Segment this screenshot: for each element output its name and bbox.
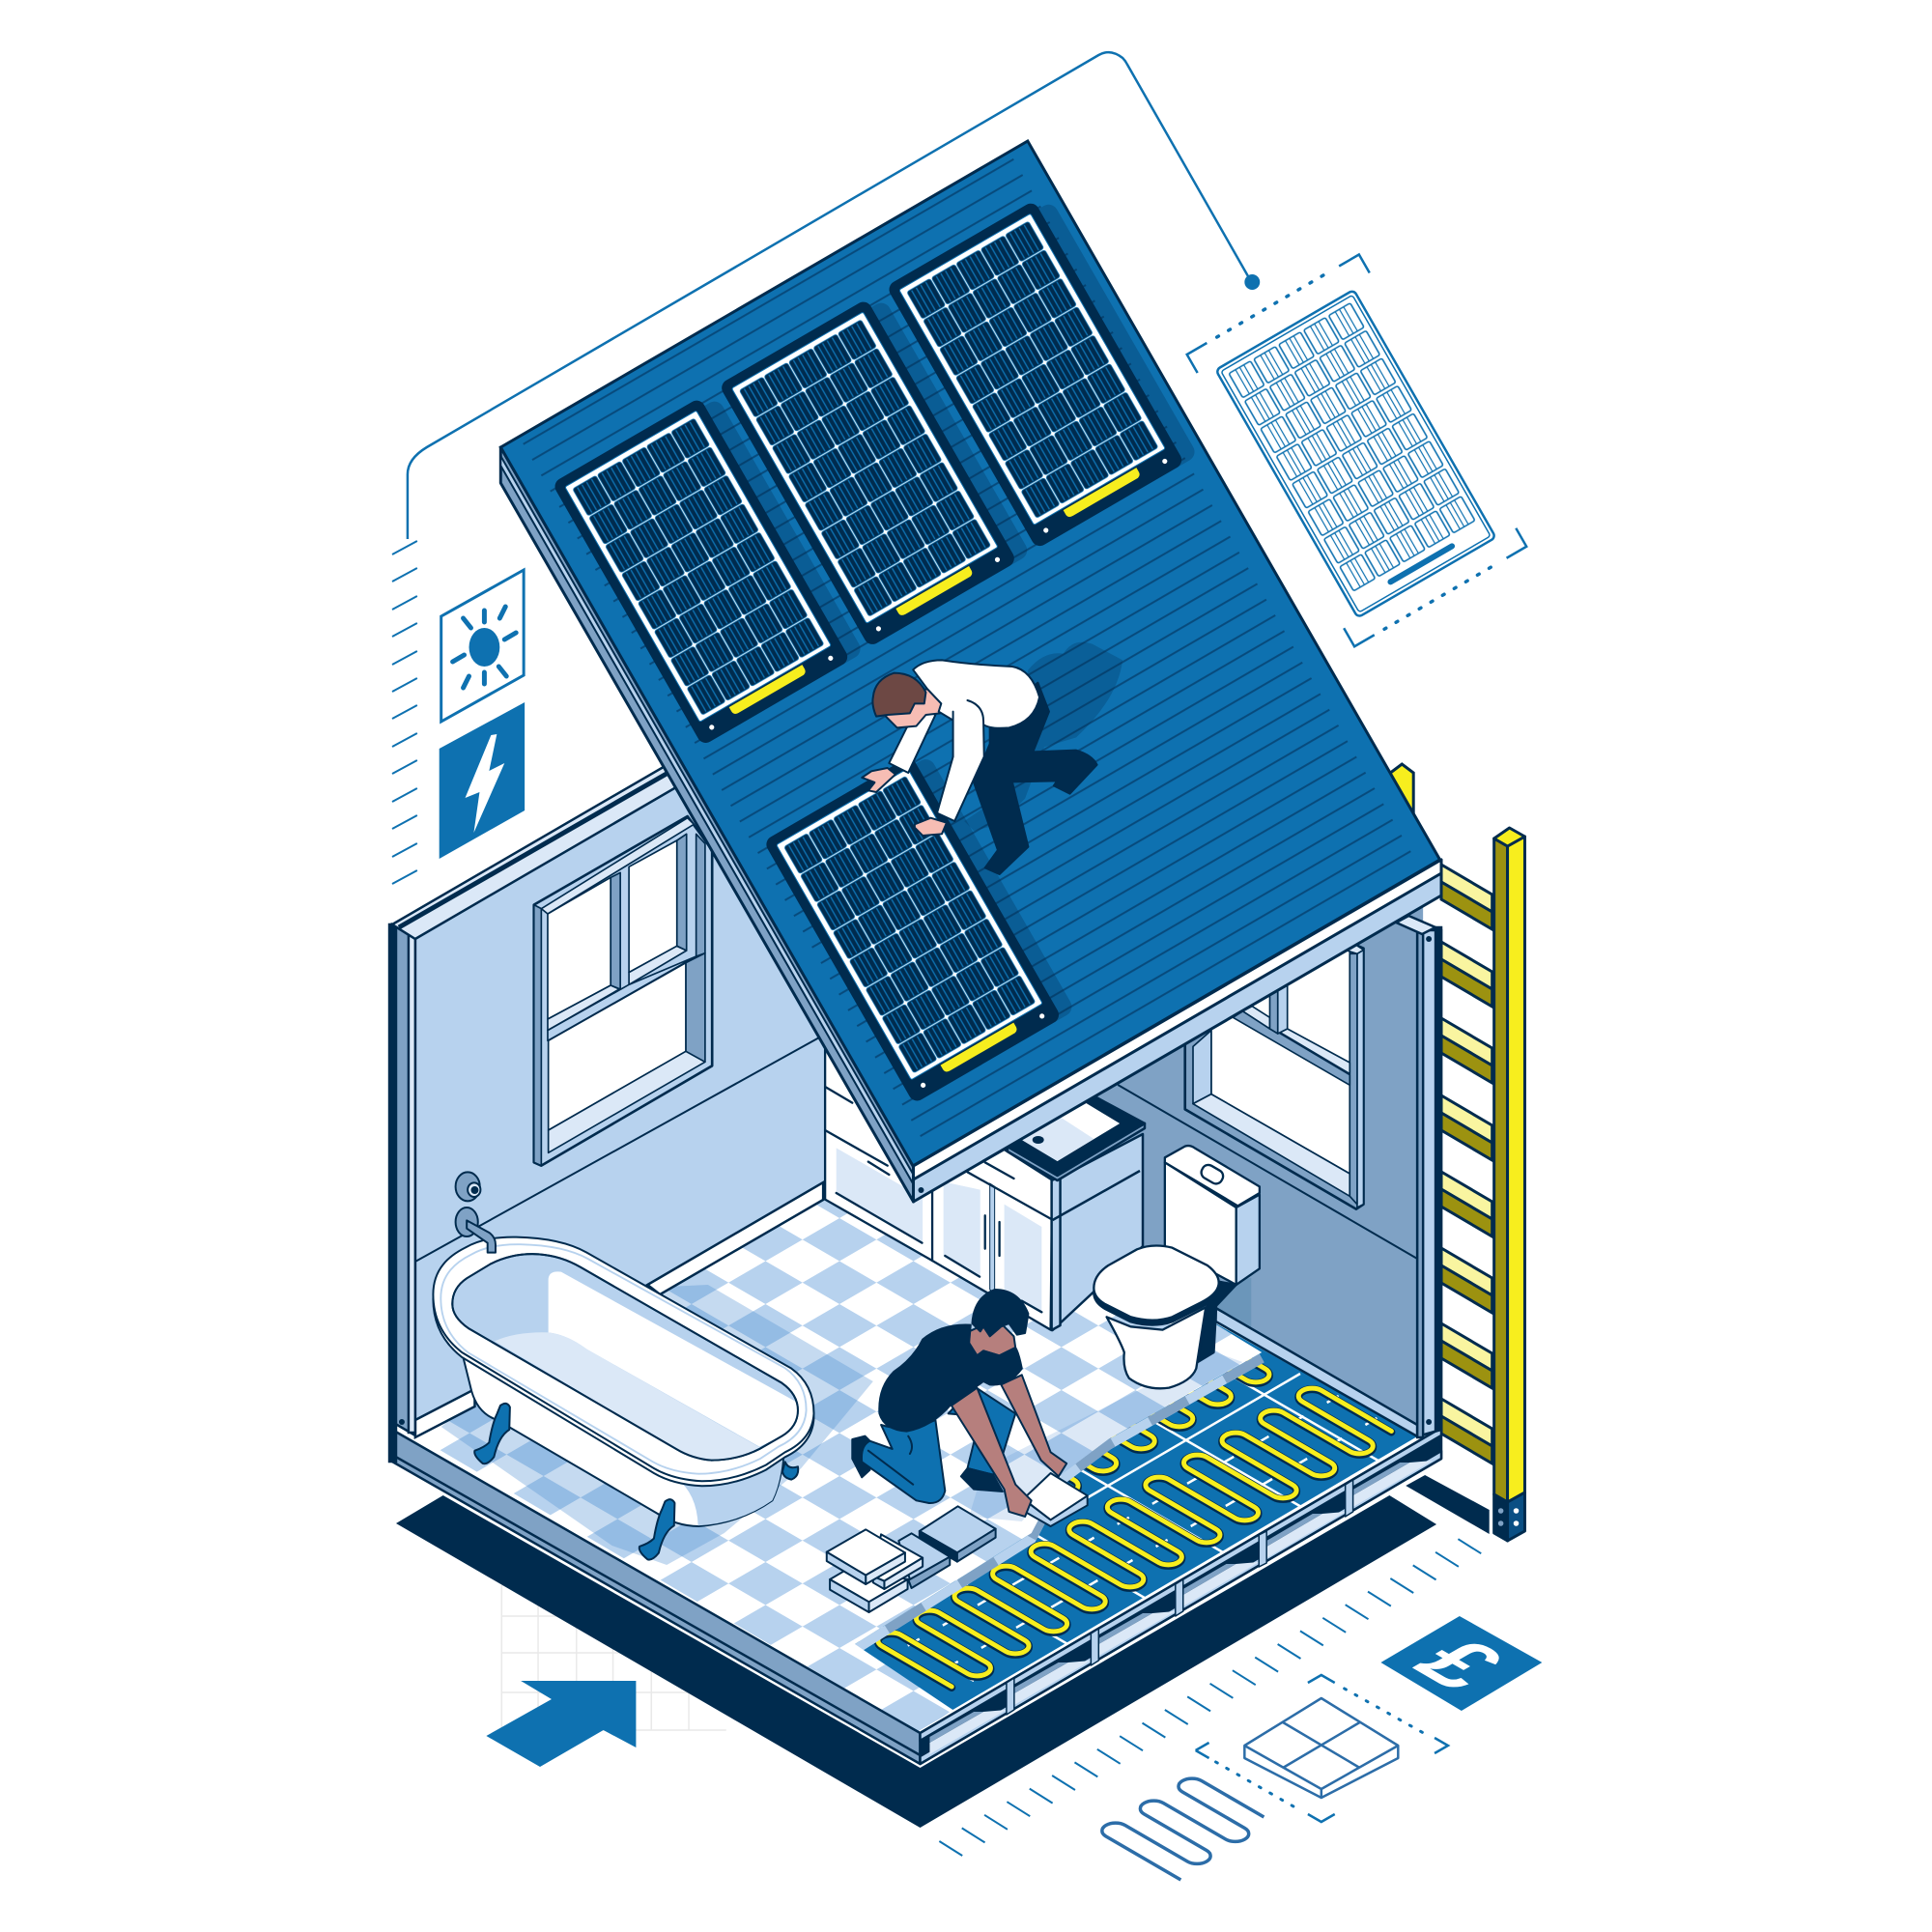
callout connector line bbox=[408, 52, 1250, 539]
tile shadow under bath bbox=[441, 1285, 873, 1565]
panel: floor bbox=[415, 1144, 1417, 1733]
sink bbox=[1022, 1103, 1120, 1161]
slim white tile bbox=[873, 1534, 923, 1589]
checker tiles bbox=[415, 1144, 1262, 1733]
window: right wall bbox=[1185, 945, 1364, 1209]
near arm bbox=[952, 1388, 1032, 1517]
frame: left post bbox=[389, 765, 681, 1462]
person: solar installer bbox=[862, 642, 1122, 874]
bracket: solar panel outline bbox=[1187, 255, 1526, 646]
heating cable rows bbox=[768, 1324, 1399, 1691]
roof bbox=[500, 141, 1441, 1202]
panel: right wall bbox=[920, 580, 1423, 1439]
solar panel 3 bbox=[886, 192, 1198, 549]
roof left side edge bbox=[500, 447, 914, 1202]
held tile bbox=[1023, 1473, 1088, 1526]
door divider bbox=[990, 1183, 995, 1293]
heating cable: lower row bbox=[871, 1385, 1399, 1691]
arrow bbox=[486, 1681, 636, 1767]
right hand bbox=[915, 818, 947, 836]
door lines bbox=[945, 1162, 1051, 1312]
roof surface bbox=[500, 141, 1440, 1166]
trousers bbox=[974, 683, 1097, 874]
icon: heating coil outline bbox=[1096, 1776, 1276, 1880]
neck and face bbox=[969, 1325, 1015, 1355]
basin floor bbox=[495, 1332, 759, 1461]
cabinets bbox=[825, 1050, 1145, 1330]
left wall top beam bbox=[392, 765, 681, 939]
door underline bbox=[837, 1193, 922, 1243]
vanity door left bbox=[944, 1181, 980, 1277]
dado line bbox=[415, 1033, 828, 1262]
toilet wall shadow bbox=[1217, 1278, 1251, 1340]
tap spout bbox=[467, 1220, 496, 1253]
vanity door right bbox=[1005, 1205, 1041, 1312]
icon: solar panel outline bbox=[1216, 290, 1495, 617]
ladder rungs bbox=[1441, 865, 1492, 1463]
ladder bbox=[1390, 764, 1524, 1541]
loose floor tiles bbox=[827, 1506, 996, 1612]
icon: floor tile outline bbox=[1244, 1698, 1398, 1798]
panel: left wall bbox=[415, 647, 920, 1435]
vanity front bbox=[932, 1150, 1052, 1330]
pallet bays light bbox=[929, 1461, 1433, 1754]
base right face bbox=[920, 1428, 1441, 1764]
floor base bbox=[392, 1428, 1441, 1764]
callout dot bbox=[1244, 274, 1260, 290]
tub feet bbox=[474, 1404, 798, 1560]
cistern lid bbox=[1165, 1146, 1260, 1206]
bottom white tile bbox=[830, 1568, 908, 1612]
shirt bbox=[913, 660, 1039, 728]
low cabinet door bbox=[837, 1148, 923, 1243]
back shoe bbox=[852, 1436, 869, 1477]
front shoe bbox=[961, 1468, 1003, 1492]
rim underside bbox=[433, 1253, 813, 1486]
solar panel 2 bbox=[719, 291, 1031, 647]
base bottom strip bbox=[920, 1451, 1441, 1764]
tub basin bbox=[452, 1254, 798, 1461]
icon: lightning bolt bbox=[440, 702, 525, 859]
pallet bays shade bbox=[929, 1463, 1409, 1743]
cistern front bbox=[1165, 1162, 1236, 1285]
shadow bbox=[964, 642, 1122, 831]
heating cable: upper row bbox=[768, 1324, 1276, 1620]
tub body shade bbox=[676, 1461, 782, 1525]
frame: right post bbox=[1396, 916, 1441, 1437]
icon: pound sign bbox=[1380, 1616, 1542, 1711]
near ladder post bbox=[1494, 828, 1524, 1541]
basin outline bbox=[452, 1254, 798, 1461]
tile edge bbox=[855, 1358, 1262, 1650]
low cabinet lines bbox=[825, 1087, 889, 1175]
solar panel 4 bbox=[763, 748, 1075, 1104]
skirting: left wall bbox=[415, 1182, 823, 1437]
tub body bbox=[462, 1352, 783, 1526]
tick marks: left bbox=[392, 541, 417, 884]
top white tile bbox=[827, 1529, 905, 1584]
post top cap bbox=[1396, 916, 1435, 934]
left hand bbox=[862, 768, 895, 792]
toilet lid bbox=[1094, 1246, 1219, 1321]
mid tile bbox=[898, 1533, 950, 1588]
pallet dividers bbox=[1007, 1480, 1353, 1715]
person: tile layer bbox=[852, 1290, 1088, 1526]
near leg bbox=[862, 1420, 945, 1503]
toilet bbox=[1094, 1146, 1260, 1388]
illustration bbox=[389, 52, 1542, 1880]
ground shadow bbox=[396, 1495, 1436, 1828]
tub rim bbox=[433, 1237, 813, 1481]
bathtub bbox=[433, 1172, 813, 1560]
t-shirt bbox=[879, 1325, 1022, 1432]
solar panel 1 bbox=[552, 389, 864, 746]
far leg bbox=[949, 1386, 1015, 1475]
toilet bowl bbox=[1107, 1307, 1206, 1388]
icon: sun bbox=[441, 570, 524, 722]
bracket: floor tile bbox=[1196, 1675, 1448, 1822]
knee crease bbox=[868, 1436, 913, 1485]
right arm outline bbox=[937, 700, 984, 821]
basin back wall bbox=[549, 1271, 798, 1447]
rim inner line bbox=[440, 1244, 807, 1474]
blue tile bbox=[920, 1506, 996, 1562]
hair bbox=[972, 1290, 1028, 1336]
wall valve bbox=[456, 1172, 480, 1201]
flush button bbox=[1199, 1162, 1226, 1186]
toilet stem bbox=[1198, 1282, 1236, 1362]
counter top bbox=[1008, 1094, 1145, 1176]
tap wall plate bbox=[456, 1208, 478, 1236]
base top strip bbox=[920, 1428, 1441, 1741]
low cabinet bbox=[825, 1050, 971, 1261]
vanity corner strip bbox=[1052, 1177, 1061, 1330]
right arm fill bbox=[937, 700, 984, 821]
vanity side bbox=[1053, 1134, 1143, 1330]
heating mat white grid bbox=[849, 1374, 1379, 1681]
seat underside bbox=[1094, 1251, 1219, 1325]
tick marks: bottom bbox=[939, 1539, 1481, 1856]
icon: pound sign: £ bbox=[1394, 1626, 1526, 1703]
neck and face bbox=[886, 689, 941, 727]
tile shadow under man bbox=[969, 1352, 1242, 1521]
dado line bbox=[1118, 1085, 1417, 1259]
base left face bbox=[392, 1430, 920, 1764]
cistern side bbox=[1236, 1195, 1260, 1285]
window: left wall bbox=[534, 816, 712, 1166]
far ladder post bbox=[1390, 764, 1413, 811]
ladder ground shadow bbox=[1406, 1475, 1490, 1534]
hair bbox=[872, 673, 925, 717]
skirting: right wall bbox=[1216, 1308, 1417, 1436]
icon: faint tile grid bbox=[501, 1585, 726, 1730]
roof front edge bbox=[914, 860, 1441, 1202]
far arm bbox=[1001, 1375, 1066, 1476]
left arm bbox=[889, 708, 935, 773]
cabinet fronts bbox=[825, 1050, 1052, 1330]
underfloor heating mat bbox=[849, 1323, 1417, 1710]
